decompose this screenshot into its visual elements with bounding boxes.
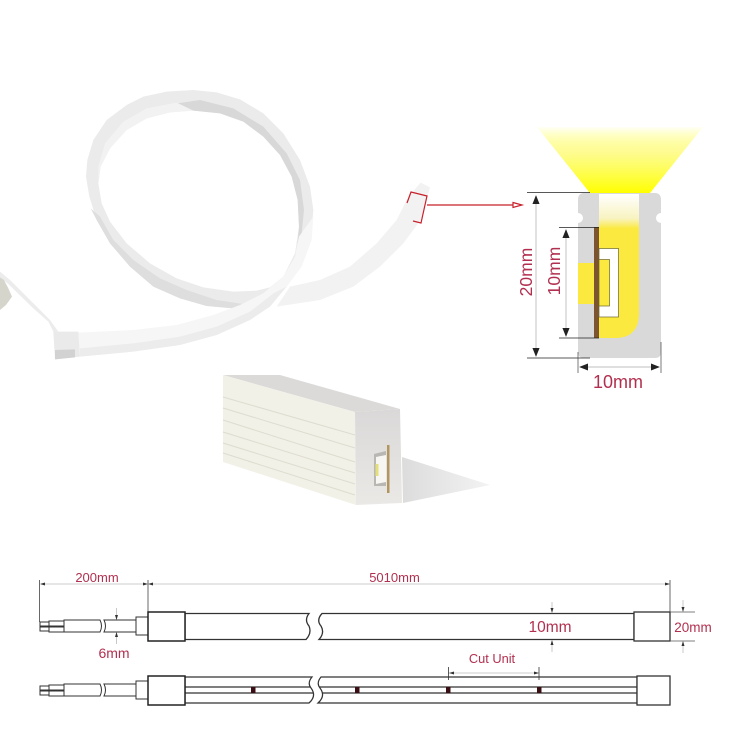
silicone body [578, 193, 661, 358]
right end cap [637, 676, 670, 705]
LED slot [374, 445, 390, 493]
bottom technical drawing [40, 651, 670, 705]
front strip section [78, 217, 313, 357]
light channel [599, 194, 639, 338]
cable and plug at left [0, 272, 58, 332]
product photo: strip end block [223, 375, 490, 505]
10mm dimension [528, 602, 572, 652]
side grooves [223, 397, 355, 495]
side yellow glow [578, 263, 595, 304]
left end cap [148, 612, 185, 641]
light cone [537, 127, 703, 193]
label: 20mm: 20mm [516, 248, 536, 296]
cut unit dimension [448, 651, 539, 680]
cut unit dimension: Cut Unit [469, 651, 516, 666]
20mm dimension: 20mm [674, 620, 712, 635]
20mm dimension [670, 600, 712, 653]
overall dimension lines [41, 583, 669, 585]
label: 200mm: 200mm [75, 570, 119, 585]
loop inner side shading [91, 100, 304, 308]
strip body [185, 614, 634, 640]
strip loop [86, 90, 313, 308]
end connector [53, 332, 80, 359]
top technical drawing [40, 570, 712, 661]
left end cap [148, 676, 185, 705]
wires and cable [40, 617, 148, 635]
strip body with inner lines [185, 677, 637, 703]
strip tail [277, 183, 430, 307]
side face [223, 375, 356, 505]
LED housing [599, 248, 618, 317]
6mm dimension [98, 608, 130, 661]
dimension lines [527, 192, 661, 373]
10mm dimension: 10mm [528, 619, 572, 636]
PCB [594, 227, 599, 338]
red callout box and leader arrow [407, 192, 522, 223]
end face [355, 409, 402, 505]
label: 5010mm: 5010mm [369, 570, 420, 585]
label: 10mm width: 10mm [593, 372, 643, 392]
wires and cable [40, 681, 148, 699]
front strip lower edge [80, 287, 287, 357]
block shadow [402, 457, 490, 503]
label: 10mm height: 10mm [544, 247, 564, 295]
cross-section diagram [516, 127, 703, 392]
right end cap [634, 612, 670, 641]
cut marks [251, 687, 542, 693]
6mm dimension: 6mm [98, 645, 130, 661]
top face [223, 375, 400, 412]
product photo: coiled neon strip [0, 90, 430, 359]
